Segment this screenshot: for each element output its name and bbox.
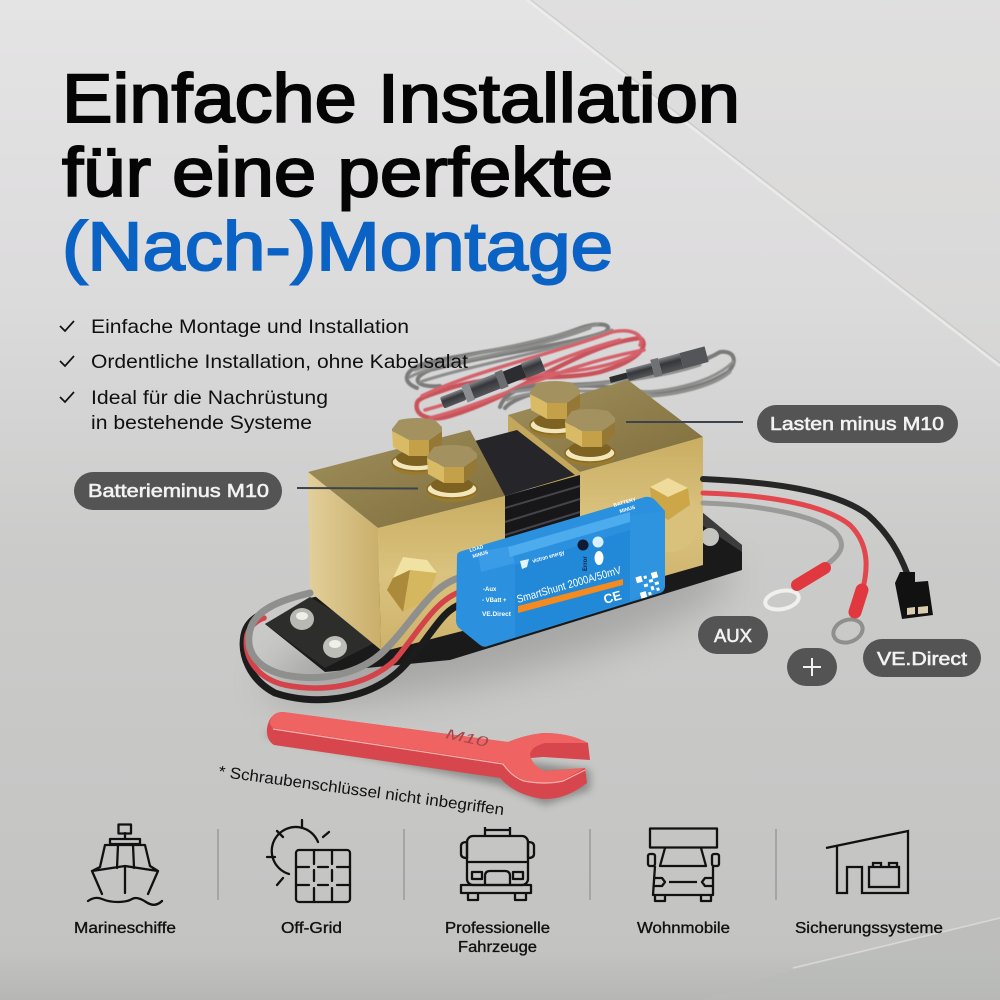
bullet list [60, 316, 469, 434]
label: Batterieminus [74, 472, 418, 510]
label: AUX [698, 616, 768, 654]
label: VE.Direct: VE.Direct [877, 648, 967, 669]
module text: victron energy [532, 550, 566, 565]
module text: VE.Direct [482, 611, 512, 618]
shunt resistor plates [467, 430, 580, 560]
module text: CE [602, 587, 624, 607]
icon: professional truck [461, 827, 534, 900]
title: Einfache Installation [62, 60, 740, 137]
module text: MINUS [472, 550, 490, 560]
bullet list: Ordentliche Installation, ohne Kabelsalat [91, 351, 469, 373]
icon: solar panel with sun [267, 820, 350, 902]
ground shadow under device [256, 528, 744, 732]
LEDs [578, 540, 588, 550]
label: AUX: AUX [714, 625, 752, 646]
category labels: Sicherungssysteme [795, 920, 943, 937]
wrench M10: M10 [444, 725, 490, 750]
label: Lasten minus [626, 405, 958, 443]
plus ring terminal [830, 590, 866, 646]
module text: MINUS [619, 505, 637, 515]
category labels: Marineschiffe [74, 920, 176, 937]
bullet list: in bestehende Systeme [91, 412, 312, 434]
module text: LOAD [469, 544, 485, 554]
orange bar [518, 579, 623, 613]
module text [469, 497, 637, 618]
cables left loop [243, 577, 462, 700]
module text: BATTERY [613, 497, 637, 509]
AUX ring terminal [764, 568, 825, 612]
victron logo [520, 559, 529, 569]
label: Lasten minus: Lasten minus M10 [770, 413, 944, 434]
title: für eine perfekte [62, 134, 613, 211]
label: Batterieminus: Batterieminus M10 [88, 480, 269, 501]
rolled spare cables at back [407, 324, 734, 418]
module text: Error [583, 556, 589, 571]
terminal nuts M10 [392, 381, 615, 502]
category labels: Off-Grid [281, 920, 342, 937]
icon: ship [88, 824, 162, 905]
category labels [74, 920, 943, 956]
label: VE.Direct [863, 639, 981, 677]
base plate [265, 512, 742, 672]
dividers [218, 829, 776, 900]
icon: backup system shed with battery [826, 831, 908, 893]
icon: motorhome [648, 828, 719, 901]
wrench M10 [267, 712, 590, 799]
title: (Nach-)Montage [62, 208, 613, 285]
title [62, 60, 740, 285]
module text: -Aux [483, 587, 497, 593]
bullet list: Einfache Montage und Installation [91, 316, 409, 338]
module text: - VBatt + [482, 598, 507, 604]
category labels: Professionelle [445, 920, 550, 937]
bullet list: Ideal für die Nachrüstung [91, 387, 328, 409]
wrench footnote: * Schraubenschlüssel nicht inbegriffen [217, 764, 505, 819]
brass shunt block: right [508, 380, 703, 600]
wrench shadow [262, 730, 590, 805]
category labels: Wohnmobile [637, 920, 730, 937]
fuse holders [439, 345, 709, 411]
brass shunt block: left [308, 430, 505, 652]
VE.Direct connector [895, 572, 933, 619]
cables to terminals [703, 479, 907, 592]
category labels: Fahrzeuge [458, 939, 537, 956]
SmartShunt module [456, 497, 665, 647]
label: plus [787, 648, 837, 686]
module text: SmartShunt 2000A/50mV [516, 564, 623, 606]
QR code [635, 571, 663, 599]
